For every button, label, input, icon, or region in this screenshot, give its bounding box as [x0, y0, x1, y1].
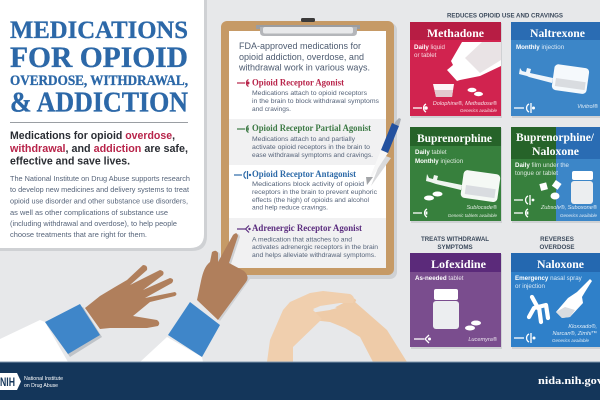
icon: syringe: [519, 68, 553, 83]
icon: bottle: [433, 289, 459, 329]
icon: tablets: [539, 180, 562, 200]
section: opioid receptor antagonist: and help reduce cravings.: [252, 204, 328, 212]
card: buprenorphine: Daily tablet: [415, 149, 447, 156]
card: naloxone: Narcan®, Zimhi™: [552, 330, 597, 337]
organization name: on Drug Abuse: [24, 383, 58, 389]
section: opioid receptor partial agonist: ease withdrawal symptoms and cravings.: [252, 152, 373, 159]
section: adrenergic receptor agonist: [237, 223, 378, 259]
section: opioid receptor antagonist: effects (the high) of opioids and alcohol: [252, 197, 370, 204]
card: buprenorphine/naloxone: Buprenorphine/: [516, 132, 595, 144]
title: MEDICATIONS: [10, 17, 188, 44]
card: naltrexone: Naltrexone: [530, 28, 585, 40]
section: opioid receptor partial agonist: activate opioid receptors in the brain to: [252, 144, 370, 151]
title: & ADDICTION: [10, 86, 188, 118]
section: opioid receptor partial agonist: Opioid Receptor Partial Agonist: [252, 123, 371, 133]
icon: agonist: [237, 80, 250, 86]
body text: [10, 174, 190, 239]
card: buprenorphine/naloxone: Daily film under the: [515, 162, 570, 169]
card: naloxone: Naloxone: [537, 259, 584, 271]
card: naloxone: Emergency nasal spray: [515, 275, 583, 282]
section: opioid receptor antagonist: Opioid Receptor Antagonist: [252, 169, 356, 179]
card: buprenorphine/naloxone: Generics available: [560, 213, 597, 218]
icon: antagonist: [234, 171, 251, 179]
card: buprenorphine: Generic tablets available: [448, 213, 497, 218]
section: adrenergic receptor agonist: Adrenergic Receptor Agonist: [252, 223, 362, 233]
card: buprenorphine: Monthly injection: [415, 158, 464, 165]
heading: treats withdrawal symptoms: [421, 236, 489, 251]
footer bar: [0, 362, 600, 400]
website: nida.nih.gov: [538, 376, 600, 387]
card: lofexidine: Lucemyra®: [468, 336, 498, 343]
organization name: National Institute: [24, 376, 63, 382]
subheading: Medications for opioid overdose,: [10, 130, 175, 142]
card: lofexidine: Lofexidine: [431, 259, 486, 271]
heading: reverses overdose: OVERDOSE: [539, 244, 575, 251]
clipboard: [221, 18, 397, 279]
subheading: [9, 130, 188, 168]
body text: to develop new medicines and delivery systems to treat: [10, 185, 189, 194]
card: methadone: Daily liquid: [414, 44, 446, 51]
heading: reverses overdose: REVERSES: [540, 236, 574, 243]
organization name: [24, 376, 63, 389]
icon: partial agonist: [237, 126, 248, 132]
section: adrenergic receptor agonist: A medication that attaches to and: [252, 236, 352, 244]
icon: receptor: [414, 335, 431, 343]
card: buprenorphine: Sublocade®: [466, 204, 498, 211]
icon: bottle: [447, 42, 501, 81]
icon: receptor: [514, 333, 536, 343]
section: opioid receptor agonist: Opioid Receptor Agonist: [252, 78, 344, 88]
card: methadone: [410, 22, 502, 118]
section: opioid receptor antagonist: Medications block activity of opioid: [252, 181, 364, 188]
body text: opioid use disorder and other substance use disorders,: [10, 196, 188, 206]
section: adrenergic receptor agonist: activates adrenergic receptors in the brain: [252, 244, 378, 251]
section: opioid receptor agonist: and cravings.: [252, 106, 291, 113]
card: methadone: Generics available: [460, 108, 497, 113]
icon: receptor: [514, 103, 535, 113]
clip: [256, 25, 360, 36]
section: opioid receptor antagonist: [234, 169, 378, 212]
card: lofexidine: [410, 253, 502, 349]
icon: pills: [468, 88, 483, 96]
section: adrenergic receptor agonist: and helps alleviate withdrawal symptoms.: [252, 252, 376, 259]
heading: treats withdrawal symptoms: SYMPTOMS: [437, 244, 473, 251]
title: OVERDOSE, WITHDRAWAL,: [10, 73, 188, 89]
card: naloxone: or injection: [515, 283, 545, 290]
body text: choose treatments that are right for them.: [10, 230, 147, 239]
icon: syringe: [426, 174, 462, 190]
card: buprenorphine/naloxone: [511, 127, 600, 223]
intro text: [238, 41, 370, 73]
intro text: opioid addiction, overdose, and: [239, 52, 364, 62]
intro text: FDA-approved medications for: [239, 41, 361, 51]
card: buprenorphine: [410, 127, 502, 223]
body text: The National Institute on Drug Abuse supports research: [10, 174, 190, 183]
section: opioid receptor antagonist: receptors in the brain to prevent euphoric: [252, 189, 378, 196]
icon: pills: [465, 320, 481, 330]
section: opioid receptor agonist: [237, 78, 380, 113]
title: [10, 17, 188, 118]
pen: [366, 118, 401, 186]
icon: vial: [551, 64, 590, 94]
section: opioid receptor partial agonist: [237, 123, 373, 159]
illustration: pointing hand with sleeve: [140, 233, 250, 362]
card: naloxone: [511, 253, 600, 349]
icon: nasal device: [529, 297, 548, 322]
icon: spray bottle: [556, 279, 592, 318]
card: naltrexone: Monthly injection: [516, 44, 565, 51]
heading: reduces opioid use and cravings: REDUCES OPIOID USE AND CRAVINGS: [447, 12, 563, 20]
icon: bottle: [571, 171, 593, 204]
card: naloxone: Generics available: [552, 338, 589, 343]
icon: adrenergic: [237, 226, 251, 232]
card: buprenorphine/naloxone: Naloxone: [532, 146, 579, 158]
card: lofexidine: As-needed tablet: [415, 275, 464, 282]
icon: receptor: [413, 209, 427, 217]
card: methadone: or tablet: [414, 52, 437, 59]
card: methadone: Dolophine®, Methadose®: [433, 100, 498, 107]
icon: receptor: [413, 104, 428, 112]
card: buprenorphine/naloxone: tongue or tablet: [515, 170, 558, 177]
heading: reverses overdose: [539, 236, 575, 251]
section: opioid receptor agonist: in the brain to block withdrawal symptoms: [252, 98, 380, 105]
card: naloxone: Kloxxado®,: [568, 323, 597, 330]
card: methadone: Methadone: [427, 28, 484, 40]
heading: treats withdrawal symptoms: TREATS WITHDRAWAL: [421, 236, 489, 243]
card: buprenorphine/naloxone: Zubsolv®, Suboxone®: [540, 204, 598, 211]
card: buprenorphine: Buprenorphine: [417, 133, 492, 145]
card: naltrexone: [511, 22, 600, 118]
intro text: withdrawal work in various ways.: [238, 63, 370, 73]
icon: receptors: [514, 195, 534, 217]
icon: pills: [424, 192, 442, 200]
section: opioid receptor agonist: Medications attach to opioid receptors: [252, 90, 368, 97]
icon: cup: [433, 84, 454, 97]
subheading: effective and save lives.: [10, 156, 130, 168]
illustration: folded peach hands: [267, 291, 407, 362]
panel: intro: [0, 0, 207, 251]
body text: (including withdrawal and overdose), to help people: [10, 219, 177, 228]
body text: as well as other complications of substance use: [10, 208, 168, 217]
icon: vial: [460, 170, 501, 203]
NIH logo: NIH: [0, 375, 15, 389]
card: naltrexone: Vivitrol®: [577, 103, 599, 110]
illustration: left hand with sleeve: [0, 265, 176, 362]
section: opioid receptor partial agonist: Medications attach to and partially: [252, 136, 356, 143]
title: FOR OPIOID: [10, 41, 188, 74]
subheading: withdrawal, and addiction are safe,: [9, 143, 188, 155]
